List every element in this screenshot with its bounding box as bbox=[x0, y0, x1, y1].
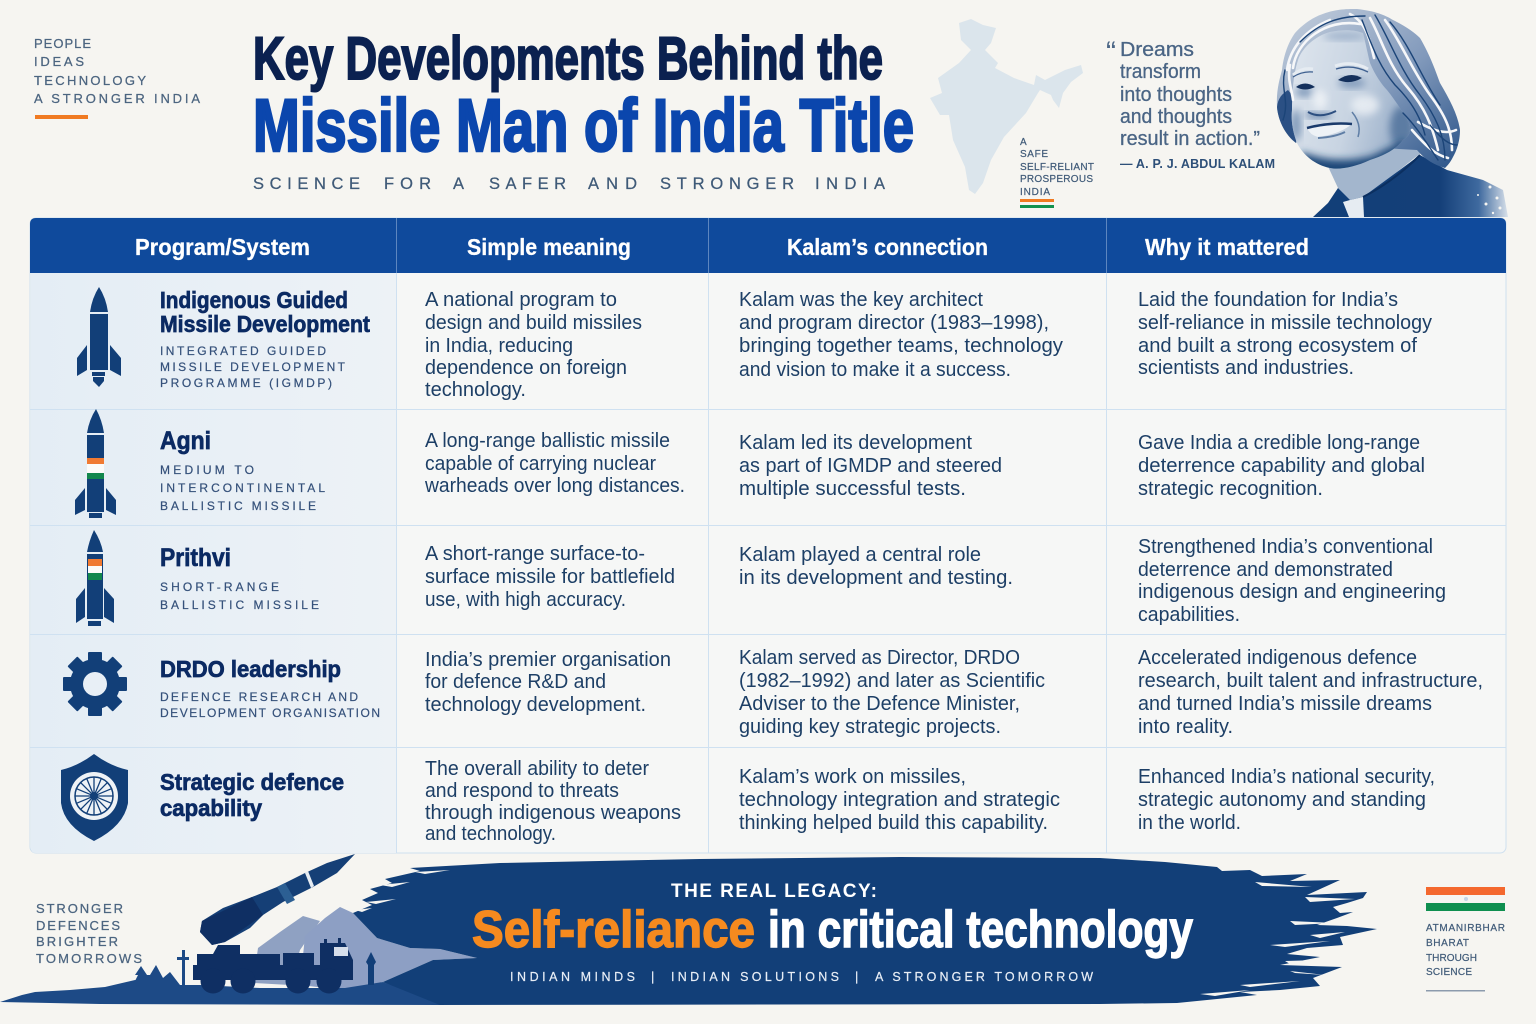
row 3 simple meaning: use, with high accuracy. bbox=[425, 589, 626, 611]
brush banner bbox=[353, 857, 1377, 1005]
subtitle: INDIA bbox=[815, 175, 885, 193]
row 4 name: DRDO leadership: DRDO leadership bbox=[160, 656, 341, 682]
row 2 name: Agni bbox=[160, 427, 325, 513]
atmanirbhar caption: THROUGH bbox=[1426, 953, 1477, 964]
row 1 why it mattered: and built a strong ecosystem of bbox=[1138, 335, 1417, 357]
title: Missile Man of India Title bbox=[253, 84, 914, 167]
icon: shield with chakra bbox=[61, 754, 128, 841]
row 2 Kalam's connection: Kalam led its development bbox=[739, 432, 972, 454]
row 3 name: Prithvi: SHORT-RANGE bbox=[160, 580, 279, 594]
row 5 name: Strategic defence capability: Strategic defence bbox=[160, 769, 344, 795]
atmanirbhar caption: SCIENCE bbox=[1426, 967, 1472, 978]
row 1 why it mattered bbox=[1138, 289, 1432, 379]
banner heading: THE REAL LEGACY: bbox=[671, 881, 877, 902]
row 4 Kalam's connection: guiding key strategic projects. bbox=[739, 716, 1001, 738]
row 3 why it mattered bbox=[1138, 536, 1446, 626]
row 4 name: DRDO leadership: DEVELOPMENT ORGANISATION bbox=[160, 706, 380, 720]
row 3 why it mattered: deterrence and demonstrated bbox=[1138, 559, 1393, 581]
row 5 simple meaning: through indigenous weapons bbox=[425, 802, 681, 824]
icon: Agni missile bbox=[75, 409, 116, 518]
row 4 why it mattered: Accelerated indigenous defence bbox=[1138, 647, 1417, 669]
icon: flag stripes bbox=[1426, 887, 1505, 911]
tagline: people ideas technology: PEOPLE bbox=[34, 36, 91, 51]
row 5 name: Strategic defence capability: capability bbox=[160, 795, 262, 821]
tagline: people ideas technology bbox=[34, 36, 200, 119]
map caption: A bbox=[1020, 137, 1027, 148]
footer tagline: BRIGHTER bbox=[36, 934, 118, 949]
banner strapline: INDIAN MINDS bbox=[510, 970, 635, 984]
portrait: A. P. J. Abdul Kalam bbox=[1277, 9, 1508, 217]
table header: Program/System bbox=[135, 234, 310, 260]
row 3 name: Prithvi: BALLISTIC MISSILE bbox=[160, 598, 319, 612]
row 1 name: Indigenous Guided Missile Development bbox=[160, 287, 370, 390]
quote: transform bbox=[1120, 60, 1201, 83]
row 1 why it mattered: self-reliance in missile technology bbox=[1138, 312, 1432, 334]
atmanirbhar caption bbox=[1426, 923, 1505, 992]
row 2 Kalam's connection: multiple successful tests. bbox=[739, 478, 966, 500]
row 2 name: Agni: MEDIUM TO bbox=[160, 463, 254, 477]
banner strapline: INDIAN SOLUTIONS bbox=[671, 970, 839, 984]
tagline: people ideas technology: IDEAS bbox=[34, 54, 84, 69]
subtitle: FOR bbox=[384, 175, 431, 193]
subtitle bbox=[253, 175, 885, 193]
footer tagline: DEFENCES bbox=[36, 918, 120, 933]
footer tagline: TOMORROWS bbox=[36, 951, 142, 966]
row 1 Kalam's connection: Kalam was the key architect bbox=[739, 289, 983, 311]
row 2 why it mattered: Gave India a credible long-range bbox=[1138, 432, 1420, 454]
icon: India map bbox=[930, 19, 1083, 194]
map caption: SELF-RELIANT bbox=[1020, 162, 1094, 173]
table header: Why it mattered bbox=[1145, 234, 1309, 260]
row 4 Kalam's connection bbox=[739, 647, 1045, 738]
row 5 simple meaning bbox=[425, 758, 681, 845]
quote bbox=[1106, 36, 1275, 171]
icon: missile, IGMDP bbox=[77, 287, 121, 387]
quote: Dreams bbox=[1120, 38, 1194, 61]
row 4 name: DRDO leadership: DEFENCE RESEARCH AND bbox=[160, 690, 358, 704]
row 2 why it mattered: deterrence capability and global bbox=[1138, 455, 1425, 477]
row 4 simple meaning: for defence R&D and bbox=[425, 671, 606, 693]
row 4 name: DRDO leadership bbox=[160, 656, 380, 720]
quote: into thoughts bbox=[1120, 83, 1232, 106]
row 2 simple meaning bbox=[424, 430, 685, 497]
row 1 name: Indigenous Guided Missile Development: Missile Development bbox=[160, 311, 370, 337]
quote: “ bbox=[1106, 36, 1116, 69]
map caption bbox=[1020, 137, 1094, 208]
row 4 simple meaning: India’s premier organisation bbox=[425, 649, 671, 671]
row 3 Kalam's connection: in its development and testing. bbox=[739, 567, 1013, 589]
row 5 simple meaning: The overall ability to deter bbox=[425, 758, 649, 780]
row 5 Kalam's connection bbox=[739, 766, 1060, 834]
footer tagline bbox=[36, 901, 142, 966]
row 3 name: Prithvi: Prithvi bbox=[160, 544, 231, 572]
icon: Prithvi missile bbox=[76, 530, 114, 626]
row 2 name: Agni: Agni bbox=[160, 427, 211, 455]
row 5 Kalam's connection: thinking helped build this capability. bbox=[739, 812, 1048, 834]
row 5 Kalam's connection: technology integration and strategic bbox=[739, 789, 1060, 811]
table header: Simple meaning bbox=[467, 234, 631, 260]
row 1 why it mattered: scientists and industries. bbox=[1138, 357, 1354, 379]
row 2 simple meaning: warheads over long distances. bbox=[424, 475, 685, 497]
row 1 name: Indigenous Guided Missile Development: PROGRAMME (IGMDP) bbox=[160, 376, 332, 390]
row 2 Kalam's connection bbox=[739, 432, 1002, 500]
row 2 why it mattered bbox=[1138, 432, 1425, 500]
banner headline bbox=[472, 901, 1193, 959]
row 3 Kalam's connection bbox=[739, 544, 1013, 589]
row 1 name: Indigenous Guided Missile Development: Indigenous Guided bbox=[160, 287, 348, 313]
table header: Kalam’s connection bbox=[787, 234, 988, 260]
row 1 Kalam's connection bbox=[739, 289, 1063, 381]
row 1 Kalam's connection: and vision to make it a success. bbox=[739, 359, 1011, 381]
row 1 Kalam's connection: and program director (1983–1998), bbox=[739, 312, 1049, 334]
row 4 Kalam's connection: Kalam served as Director, DRDO bbox=[739, 647, 1020, 669]
subtitle: AND bbox=[588, 175, 637, 193]
banner strapline: A STRONGER TOMORROW bbox=[875, 970, 1093, 984]
row 1 simple meaning: design and build missiles bbox=[425, 312, 642, 334]
row 1 Kalam's connection: bringing together teams, technology bbox=[739, 335, 1063, 357]
row 1 simple meaning: in India, reducing bbox=[425, 335, 573, 357]
atmanirbhar caption: BHARAT bbox=[1426, 938, 1469, 949]
table header bbox=[30, 218, 1506, 273]
row 4 simple meaning: technology development. bbox=[425, 694, 646, 716]
subtitle: SCIENCE bbox=[253, 175, 360, 193]
subtitle: STRONGER bbox=[660, 175, 794, 193]
row 4 why it mattered: research, built talent and infrastructure, bbox=[1138, 670, 1483, 692]
row 3 simple meaning bbox=[425, 543, 675, 611]
map caption: INDIA bbox=[1020, 187, 1050, 198]
row 3 simple meaning: A short-range surface-to- bbox=[425, 543, 645, 565]
row 5 Kalam's connection: Kalam’s work on missiles, bbox=[739, 766, 966, 788]
quote: result in action.” bbox=[1120, 127, 1260, 150]
row 2 name: Agni: INTERCONTINENTAL bbox=[160, 481, 325, 495]
quote: and thoughts bbox=[1120, 105, 1232, 128]
row 3 simple meaning: surface missile for battlefield bbox=[425, 566, 675, 588]
row 1 name: Indigenous Guided Missile Development: INTEGRATED GUIDED bbox=[160, 344, 326, 358]
row 2 simple meaning: capable of carrying nuclear bbox=[425, 453, 656, 475]
row 2 simple meaning: A long-range ballistic missile bbox=[425, 430, 670, 452]
subtitle: A bbox=[453, 175, 464, 193]
row 5 why it mattered: Enhanced India’s national security, bbox=[1138, 766, 1435, 788]
row 5 why it mattered: in the world. bbox=[1138, 812, 1241, 834]
tagline: people ideas technology: TECHNOLOGY bbox=[34, 73, 146, 88]
row 1 why it mattered: Laid the foundation for India’s bbox=[1138, 289, 1398, 311]
title: Key Developments Behind the bbox=[253, 25, 883, 92]
table panel bbox=[30, 218, 1506, 853]
icon: gear bbox=[63, 652, 127, 716]
row 4 why it mattered: and turned India’s missile dreams bbox=[1138, 693, 1432, 715]
row 3 Kalam's connection: Kalam played a central role bbox=[739, 544, 981, 566]
row 5 simple meaning: and respond to threats bbox=[425, 780, 619, 802]
row 4 why it mattered bbox=[1138, 647, 1483, 738]
row 5 simple meaning: and technology. bbox=[425, 823, 556, 845]
atmanirbhar caption: ATMANIRBHAR bbox=[1426, 923, 1505, 934]
banner strapline bbox=[510, 970, 1093, 984]
map caption: SAFE bbox=[1020, 149, 1048, 160]
row 4 Kalam's connection: (1982–1992) and later as Scientific bbox=[739, 670, 1045, 692]
row 2 name: Agni: BALLISTIC MISSILE bbox=[160, 499, 316, 513]
illustration: mountains behind launcher bbox=[253, 907, 477, 990]
footer tagline: STRONGER bbox=[36, 901, 123, 916]
row 4 Kalam's connection: Adviser to the Defence Minister, bbox=[739, 693, 1020, 715]
row 2 why it mattered: strategic recognition. bbox=[1138, 478, 1323, 500]
row 5 why it mattered: strategic autonomy and standing bbox=[1138, 789, 1426, 811]
row 3 why it mattered: Strengthened India’s conventional bbox=[1138, 536, 1433, 558]
quote: — A. P. J. ABDUL KALAM bbox=[1120, 157, 1275, 171]
row 3 why it mattered: capabilities. bbox=[1138, 604, 1240, 626]
row 1 simple meaning: dependence on foreign bbox=[425, 357, 627, 379]
row 1 simple meaning: technology. bbox=[425, 379, 526, 401]
row 1 simple meaning bbox=[425, 289, 642, 401]
row 4 why it mattered: into reality. bbox=[1138, 716, 1233, 738]
row 5 why it mattered bbox=[1138, 766, 1435, 834]
row 5 name: Strategic defence capability bbox=[160, 769, 344, 821]
row 2 Kalam's connection: as part of IGMDP and steered bbox=[739, 455, 1002, 477]
row 3 why it mattered: indigenous design and engineering bbox=[1138, 581, 1446, 603]
banner headline: Self-reliance bbox=[472, 901, 755, 959]
subtitle: SAFER bbox=[489, 175, 566, 193]
tagline: people ideas technology: A STRONGER INDIA bbox=[34, 91, 200, 106]
illustration: ground, trees and figures bbox=[0, 950, 440, 1005]
banner headline: in critical technology bbox=[768, 901, 1193, 959]
row 1 name: Indigenous Guided Missile Development: MISSILE DEVELOPMENT bbox=[160, 360, 346, 374]
brush texture: dry edges bbox=[355, 870, 1355, 996]
row 3 name: Prithvi bbox=[160, 544, 319, 612]
row 4 simple meaning bbox=[425, 649, 671, 716]
banner strapline: | bbox=[855, 970, 858, 984]
banner strapline: | bbox=[651, 970, 654, 984]
row 1 simple meaning: A national program to bbox=[425, 289, 617, 311]
illustration: missile launcher truck bbox=[193, 854, 355, 994]
map caption: PROSPEROUS bbox=[1020, 174, 1093, 185]
title bbox=[253, 25, 914, 167]
